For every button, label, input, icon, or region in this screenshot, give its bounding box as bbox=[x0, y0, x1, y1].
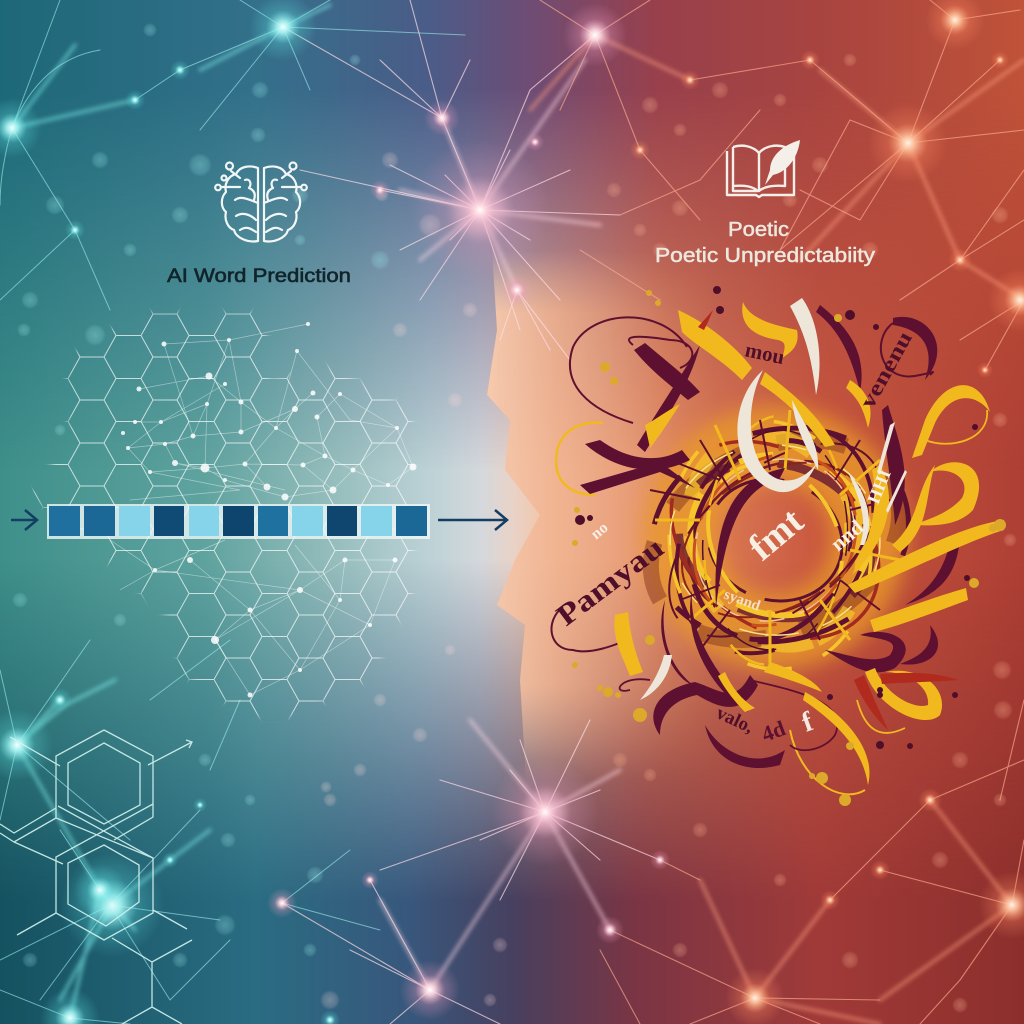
maroon calligraphic strokes bbox=[580, 305, 960, 768]
data point dots bbox=[121, 322, 416, 698]
gold flecks and dark dots bbox=[572, 286, 1006, 806]
calligraphic words: HHI bbox=[863, 467, 895, 506]
calligraphic words: syand bbox=[722, 587, 763, 615]
heading: Poetic Unpredictability bbox=[655, 219, 875, 267]
calligraphic words: fmt bbox=[741, 500, 812, 569]
calligraphic words: mou bbox=[743, 337, 787, 369]
icon: open book with quill bbox=[727, 140, 800, 197]
arrow: output bbox=[438, 510, 507, 530]
calligraphy swirl bbox=[550, 286, 1006, 806]
heading: Poetic Unpredictability: Poetic bbox=[728, 219, 789, 241]
network mesh over hexagons bbox=[110, 324, 413, 695]
large hexagon molecule outline bbox=[0, 730, 192, 1024]
arrow: input bbox=[11, 510, 37, 530]
white ribbons bbox=[640, 298, 907, 700]
icon: brain bbox=[215, 162, 307, 241]
network lines: center side bbox=[282, 0, 660, 1024]
woven nest ring bbox=[618, 391, 933, 689]
calligraphic words: valo, bbox=[713, 702, 757, 738]
network lines: teal side bbox=[0, 0, 465, 1024]
calligraphic words bbox=[550, 327, 917, 747]
calligraphic words: nnd bbox=[826, 515, 868, 556]
calligraphic words: venenu bbox=[855, 327, 917, 412]
hexagon grid with data points bbox=[20, 300, 430, 730]
red ribbons bbox=[698, 310, 958, 730]
heading: AI Word Prediction: AI Word Prediction bbox=[167, 265, 351, 287]
calligraphic words: Pamyau bbox=[550, 531, 670, 633]
calligraphic words: f bbox=[798, 706, 818, 739]
calligraphic words: no bbox=[588, 519, 612, 543]
thin maroon and gold loops bbox=[552, 317, 987, 794]
quill feather bbox=[765, 140, 800, 185]
token sequence bar bbox=[47, 504, 430, 539]
network lines: red side bbox=[540, 0, 1024, 1024]
heading: Poetic Unpredictability: Poetic Unpredictabiity bbox=[655, 245, 875, 267]
torn paper edge between panels bbox=[487, 256, 681, 772]
yellow calligraphic ribbons bbox=[614, 302, 1004, 785]
calligraphic words: 4d bbox=[758, 715, 789, 747]
